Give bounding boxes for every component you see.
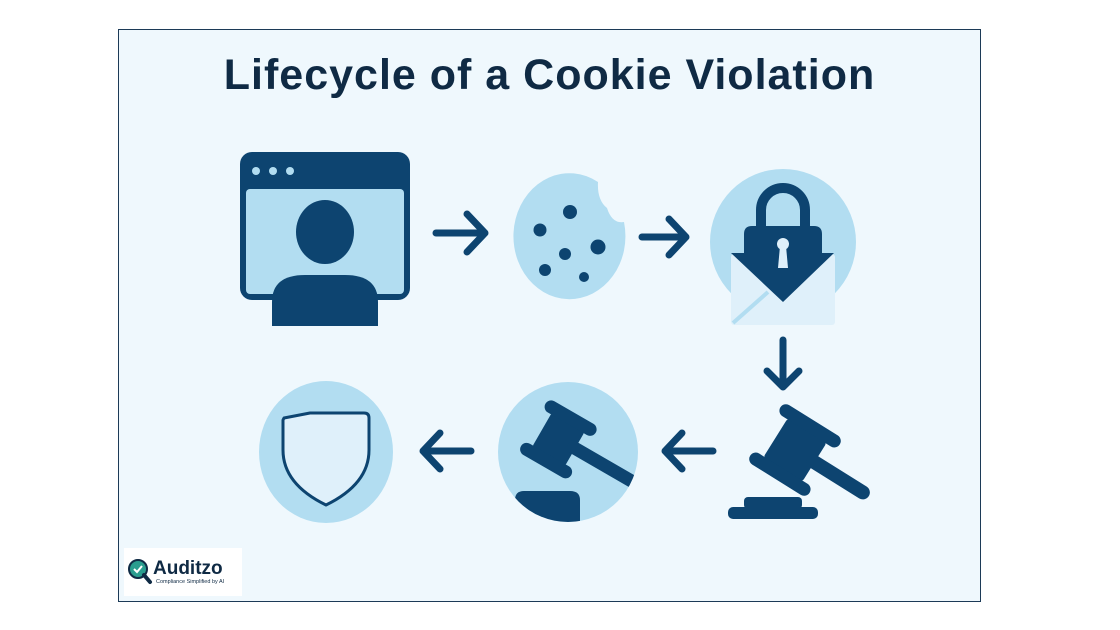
logo: Auditzo: Compliance Simplified by AI	[156, 579, 224, 585]
logo: Auditzo: Auditzo	[153, 558, 223, 579]
icon: gavel in circle	[498, 382, 638, 522]
arrow: cookie to lock	[642, 219, 686, 255]
icon: shield	[259, 381, 393, 523]
arrow: left 2	[423, 433, 471, 469]
arrow: browser to cookie	[436, 214, 485, 252]
panel: main frame	[118, 29, 981, 602]
icon: cookie	[513, 173, 625, 299]
icon: gavel	[728, 402, 887, 526]
arrow: down	[767, 340, 799, 387]
icon: browser with user	[240, 152, 410, 326]
logo: Auditzo	[124, 548, 242, 596]
icon: lock with envelope	[710, 169, 856, 325]
arrow: left 1	[665, 433, 713, 469]
title: Lifecycle of a Cookie Violation	[224, 51, 875, 99]
